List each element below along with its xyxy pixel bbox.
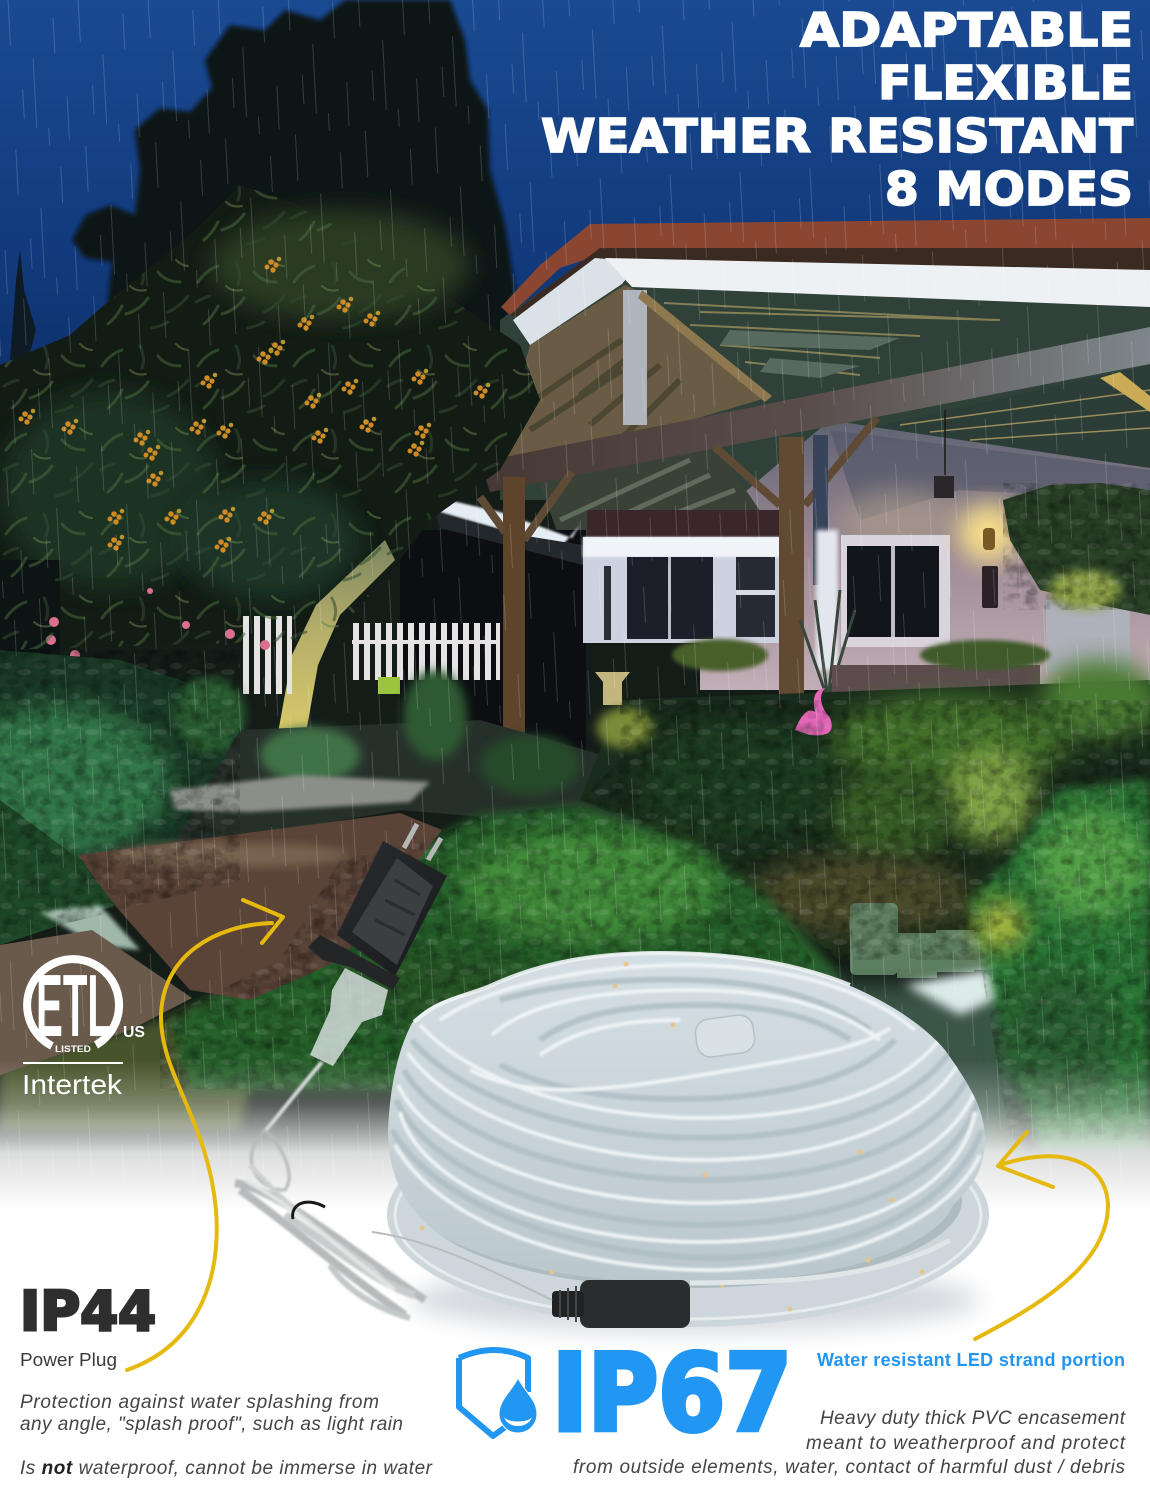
tree stump ornaments xyxy=(850,903,1008,978)
IP44 description xyxy=(20,1392,433,1479)
house backing xyxy=(500,250,1150,500)
LED dots xyxy=(420,962,924,1312)
garden lantern xyxy=(595,672,630,705)
bonsai shrubs xyxy=(672,639,768,671)
right garden bushes xyxy=(640,660,1150,935)
ceiling light stripes xyxy=(664,303,1000,375)
ETL certification logo xyxy=(22,956,145,1100)
white glow beside blue post xyxy=(816,530,838,670)
shield outline xyxy=(459,1350,528,1436)
lit path edge xyxy=(40,905,140,950)
ground behind coil xyxy=(800,985,1020,1175)
white picket fence right xyxy=(352,623,500,680)
LED strand label: Water resistant LED strand portion xyxy=(817,1350,1125,1370)
dark patio roof xyxy=(435,512,583,565)
blue post behind pergola xyxy=(813,435,828,585)
IP67 description xyxy=(573,1408,1126,1478)
white gable fascia xyxy=(513,258,640,345)
gable joists xyxy=(520,340,680,440)
back tree silhouette xyxy=(72,0,515,430)
dusk shadow on wall xyxy=(830,430,1150,520)
headline: FLEXIBLE xyxy=(878,56,1133,110)
white ground glow behind coil xyxy=(905,965,1030,1015)
headline: ADAPTABLE xyxy=(800,3,1133,57)
left dark grass xyxy=(0,800,115,945)
wall plaque xyxy=(982,566,998,608)
clear plug strain relief xyxy=(310,968,388,1066)
bundled clear cord xyxy=(235,1062,425,1318)
center small shrubs xyxy=(260,727,360,783)
power plug label: Power Plug xyxy=(20,1349,117,1370)
icon: shield with water drop xyxy=(459,1350,537,1436)
porch shrub xyxy=(403,670,467,760)
left dark yard xyxy=(0,560,60,660)
porch light glow xyxy=(958,503,1018,563)
white support post xyxy=(623,290,647,425)
fence flowers xyxy=(46,588,270,660)
left ground foliage xyxy=(0,650,250,940)
IP67 rating: IP67 xyxy=(552,1332,792,1455)
coil inner base shade xyxy=(418,1112,962,1288)
IP44 description: Protection against water splashing from xyxy=(20,1392,379,1413)
dead tree silhouette xyxy=(10,250,36,360)
ceiling pale planks xyxy=(720,330,900,378)
bay window panes xyxy=(604,557,775,640)
plug prong right xyxy=(428,838,441,860)
coil soft shadow xyxy=(410,1268,980,1332)
outdoor cushions xyxy=(832,665,1040,700)
stone ledge xyxy=(170,775,430,812)
front tree canopy xyxy=(0,185,540,650)
IP44 rating: IP44 xyxy=(20,1280,156,1343)
pergola beam xyxy=(480,327,1150,492)
coil end cap xyxy=(694,1013,756,1059)
IP44 description: Is not waterproof, cannot be immerse in water xyxy=(20,1458,433,1479)
base ring highlight xyxy=(395,1111,981,1319)
mid garden ground xyxy=(170,720,640,850)
bright left shrub xyxy=(175,677,245,753)
bay fascia glow xyxy=(583,537,781,557)
stone path xyxy=(78,813,442,1000)
background: rainy night garden scene xyxy=(0,0,1150,1196)
sky xyxy=(0,0,1150,420)
black cord connector xyxy=(552,1280,690,1328)
bay window wall xyxy=(583,537,781,643)
left verge grass xyxy=(0,1000,260,1130)
listed label: LISTED xyxy=(55,1044,92,1054)
IP44 description: any angle, "splash proof", such as light rain xyxy=(20,1414,403,1435)
yellow arrow to coil xyxy=(975,1132,1108,1339)
pergola post right xyxy=(779,437,804,702)
lantern lit foliage xyxy=(597,708,653,748)
coil base ring xyxy=(387,1103,989,1327)
wall bright spot xyxy=(840,490,960,550)
coil lower front ring xyxy=(690,1240,950,1283)
dark band under tiles xyxy=(510,248,1150,320)
power plug body xyxy=(308,841,447,990)
coil tubes xyxy=(392,965,982,1270)
foliage texture xyxy=(0,483,1150,1140)
LED rope light coil xyxy=(387,952,989,1332)
bright left grass xyxy=(0,705,170,855)
rear ceiling lines xyxy=(900,390,1150,440)
headline: 8 MODES xyxy=(885,162,1133,216)
hanging lantern xyxy=(934,410,954,498)
right foreground leaves xyxy=(970,780,1150,1150)
yellow shrub highlight xyxy=(1049,570,1121,610)
US mark: US xyxy=(123,1024,145,1041)
ETL ring xyxy=(27,959,119,1046)
under-pergola rafter lines xyxy=(560,460,735,535)
tree leaf marks xyxy=(0,185,540,650)
IP67 description: Heavy duty thick PVC encasement xyxy=(820,1408,1126,1429)
center low bush xyxy=(170,805,840,1090)
house roof tiles xyxy=(501,218,1150,315)
water drop xyxy=(499,1378,537,1433)
picket rail xyxy=(352,640,500,644)
white bottom fade xyxy=(0,1060,1150,1210)
plug prong left xyxy=(404,824,417,848)
top right shrub xyxy=(1003,483,1150,615)
Intertek wordmark: Intertek xyxy=(22,1069,123,1100)
under-pergola rafters xyxy=(535,445,780,540)
drop highlight xyxy=(504,1417,532,1426)
white picket fence left xyxy=(243,616,292,694)
warm gable ceiling xyxy=(500,285,770,470)
dark patio interior xyxy=(400,530,586,760)
flamingo ornament xyxy=(795,688,832,735)
rear teal ceiling xyxy=(860,365,1150,470)
coil top edge highlight xyxy=(414,953,850,1022)
white roof fascia xyxy=(605,258,1150,307)
lattice screen xyxy=(1046,600,1130,672)
coil body xyxy=(388,952,985,1283)
ETL certification logo: ETL xyxy=(36,956,112,1055)
divider line xyxy=(23,1062,123,1064)
tan rafter xyxy=(638,290,772,402)
porch lamp xyxy=(983,528,995,550)
stone step xyxy=(0,930,192,1075)
dark scene base xyxy=(0,400,1150,1260)
tube shadows xyxy=(392,980,982,1258)
dark palm plant xyxy=(800,590,855,700)
IP67 description: from outside elements, water, contact of harmful dust / debris xyxy=(573,1457,1126,1478)
thin wire to connector xyxy=(372,1232,552,1300)
headline xyxy=(541,3,1134,216)
white bottom area xyxy=(0,1209,1150,1500)
path sheen xyxy=(110,843,350,867)
yellow arrow to plug xyxy=(127,900,283,1370)
lime flower pot xyxy=(378,677,400,694)
right garden bed xyxy=(580,680,1150,960)
right window frame xyxy=(841,535,950,647)
white glow strip under pergola xyxy=(435,497,580,548)
tube highlights xyxy=(395,965,980,1270)
black cord tie xyxy=(293,1202,325,1219)
bay small roof xyxy=(587,510,782,538)
pale right brace xyxy=(1100,372,1150,412)
lit shrub near lantern xyxy=(480,735,580,795)
IP67 description: meant to weatherproof and protect xyxy=(806,1433,1126,1454)
tree fruit clusters xyxy=(18,257,490,553)
tree trunk xyxy=(278,540,395,733)
headline: WEATHER RESISTANT xyxy=(541,109,1134,163)
bonsai shrub right xyxy=(920,640,1050,670)
house wall xyxy=(700,420,1150,690)
pergola brace lines xyxy=(480,418,877,540)
pergola post left xyxy=(503,477,525,739)
